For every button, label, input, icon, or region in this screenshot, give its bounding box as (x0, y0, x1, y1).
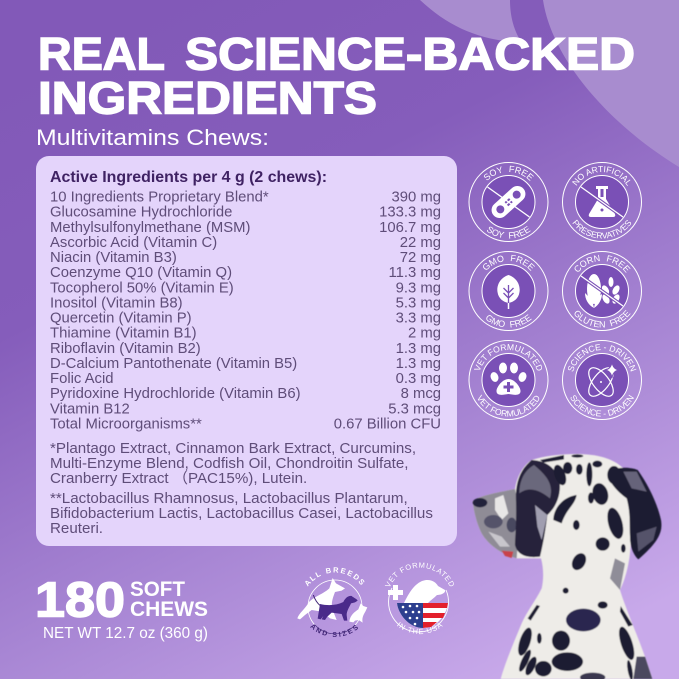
ingredient names: Riboflavin (Vitamin B2) (50, 341, 201, 357)
title: INGREDIENTS (38, 72, 377, 124)
badge: no artificial preservatives: NO ARTIFICIAL (572, 166, 630, 186)
badge: all breeds and sizes (297, 567, 368, 637)
ingredient names: Inositol (Vitamin B8) (50, 295, 183, 311)
ingredient names: Coenzyme Q10 (Vitamin Q) (50, 265, 232, 281)
ingredient amounts: 106.7 mg (379, 220, 441, 236)
count: 180 soft chews: CHEWS (130, 598, 208, 621)
icon: white small dog (349, 603, 367, 623)
footnote: proprietary blend: Multi-Enzyme Blend, Codfish Oil, Chondroitin Sulfate, (50, 455, 408, 472)
icon: corn and wheat (585, 274, 621, 308)
ingredient names: Vitamin B12 (50, 401, 130, 417)
ingredient amounts: 9.3 mg (396, 280, 441, 296)
badge: all breeds and sizes: AND SIZES (310, 624, 358, 637)
spots (515, 454, 652, 679)
badge: no artificial preservatives (562, 162, 642, 242)
ingredient amounts: 2 mg (408, 326, 441, 342)
dog photo illustration (473, 454, 661, 679)
ingredient amounts: 5.3 mcg (388, 401, 441, 417)
badge: soy free (468, 162, 548, 242)
icon: flag shield (397, 603, 448, 628)
ingredient amounts: 1.3 mg (396, 341, 441, 357)
ingredient names: Folic Acid (50, 371, 114, 387)
badge: soy free: SOY FREE (487, 226, 531, 239)
footnote: microorganisms: Bifidobacterium Lactis, Lactobacillus Casei, Lactobacillus (50, 505, 433, 522)
icon: flask (589, 186, 615, 217)
title: REAL (38, 28, 165, 80)
icon: white large dog (297, 578, 345, 620)
left ear (515, 460, 560, 557)
ingredient names: 10 Ingredients Proprietary Blend* (50, 190, 269, 206)
ingredient names: Tocopherol 50% (Vitamin E) (50, 280, 234, 296)
decorative corner shape left (420, 0, 522, 43)
badge: vet formulated in the usa: IN THE USA (397, 622, 443, 634)
ingredient amounts: 0.67 Billion CFU (334, 416, 441, 432)
badge: all breeds and sizes: ALL BREEDS (305, 567, 364, 586)
badge: gmo free: GMO FREE (483, 254, 535, 271)
ingredient amounts: 11.3 mg (388, 265, 441, 281)
panel: ingredients (36, 156, 457, 546)
ingredient amounts: 3.3 mg (396, 310, 441, 326)
mouth (502, 551, 513, 558)
footnote: microorganisms (50, 490, 433, 537)
ingredient names: Thiamine (Vitamin B1) (50, 326, 197, 342)
ingredient names: Glucosamine Hydrochloride (50, 205, 232, 221)
badge: vet formulated (468, 340, 548, 420)
badge: science driven: SCIENCE - DRIVEN (568, 344, 636, 372)
count: 180 soft chews: SOFT (130, 578, 185, 601)
ingredient amounts: 72 mg (400, 250, 441, 266)
badge: vet formulated in the usa: VET FORMULATED (384, 562, 454, 586)
icon: purple dog tail (313, 595, 321, 606)
ingredient names: Niacin (Vitamin B3) (50, 250, 177, 266)
ingredient amounts (334, 190, 441, 432)
ingredient names: Methylsulfonylmethane (MSM) (50, 220, 251, 236)
title: SCIENCE-BACKED (185, 28, 635, 80)
icon: leaf (497, 275, 520, 309)
badge: gmo free (468, 251, 548, 331)
ingredient amounts: 133.3 mg (379, 205, 441, 221)
icon: plus (388, 585, 403, 600)
badge: vet formulated: VET FORMULATED (478, 394, 540, 417)
ingredient names: Pyridoxine Hydrochloride (Vitamin B6) (50, 386, 301, 402)
icon: atom and star (584, 362, 619, 400)
count: 180 soft chews (35, 574, 208, 642)
icon: soybean pod (488, 183, 529, 221)
icon: purple dog (318, 596, 358, 621)
badge: corn free gluten free: CORN FREE (574, 254, 630, 273)
badge: gmo free: GMO FREE (486, 314, 532, 328)
ingredient amounts: 22 mg (400, 235, 441, 251)
decorative corner shape right (543, 0, 679, 167)
ingredient amounts: 5.3 mg (396, 295, 441, 311)
badge: corn free gluten free (562, 251, 642, 331)
subtitle: Multivitamins Chews: (36, 125, 269, 150)
footnote: microorganisms: **Lactobacillus Rhamnosus, Lactobacillus Plantarum, (50, 490, 408, 507)
muzzle speckles (473, 489, 520, 558)
footnote: proprietary blend: Cranberry Extract （PAC15%), Lutein. (50, 470, 307, 487)
badge: science driven: SCIENCE - DRIVEN (570, 394, 634, 416)
icon: paw with cross (489, 362, 528, 395)
net weight: NET WT 12.7 oz (360 g) (43, 625, 208, 642)
ingredient names: D-Calcium Pantothenate (Vitamin B5) (50, 356, 297, 372)
ingredient names: Ascorbic Acid (Vitamin C) (50, 235, 217, 251)
ingredient names (50, 190, 301, 432)
badge: science driven (562, 340, 642, 420)
ingredient amounts: 0.3 mg (396, 371, 441, 387)
badge: soy free: SOY FREE (484, 166, 534, 181)
ingredient names: Quercetin (Vitamin P) (50, 310, 192, 326)
icon: dog head (404, 580, 445, 603)
badge: no artificial preservatives: PRESERVATIVES (572, 220, 631, 239)
title (38, 28, 635, 124)
badge: vet formulated: VET FORMULATED (474, 344, 542, 370)
footnote: proprietary blend (50, 440, 416, 487)
badge: vet formulated in the usa (384, 562, 454, 634)
footnote: proprietary blend: *Plantago Extract, Cinnamon Bark Extract, Curcumins, (50, 440, 416, 457)
footnote: microorganisms: Reuteri. (50, 520, 103, 537)
ingredient names: Total Microorganisms** (50, 416, 202, 432)
panel heading: Active Ingredients per 4 g (2 chews): (50, 169, 327, 186)
ingredient amounts: 8 mcg (401, 386, 441, 402)
count: 180 soft chews: 180 (35, 574, 125, 628)
ingredient amounts: 1.3 mg (396, 356, 441, 372)
badge: corn free gluten free: GLUTEN FREE (574, 310, 630, 328)
right ear (607, 468, 661, 559)
neck shading (610, 558, 625, 590)
dog body (473, 454, 652, 679)
ingredient amounts: 390 mg (391, 190, 441, 206)
